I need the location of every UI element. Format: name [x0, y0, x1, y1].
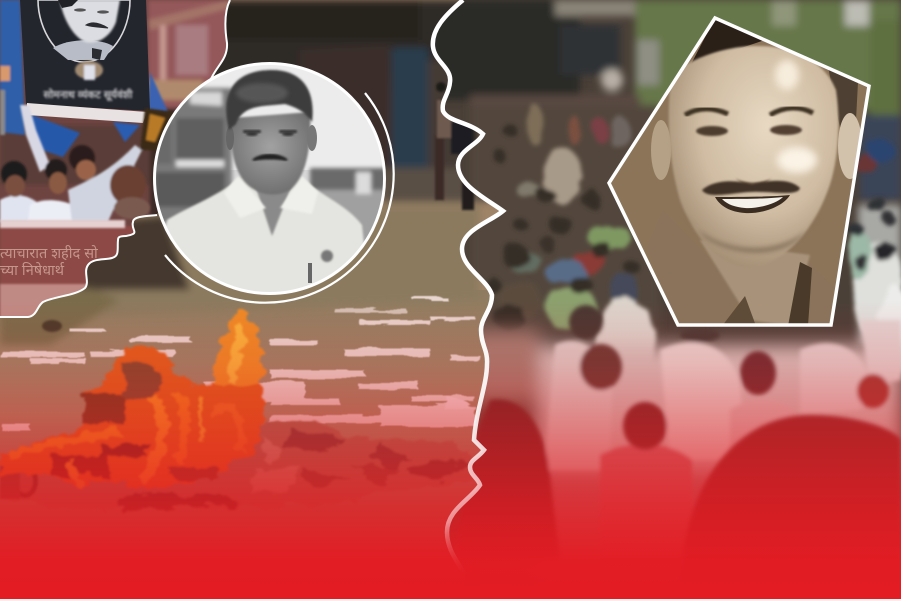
bottom edge: [0, 599, 901, 601]
smile: [715, 195, 790, 213]
sky: [201, 65, 382, 170]
poster text: सोमनाथ व्यंकट सूर्यवंशी: [42, 88, 134, 102]
banner slogan: त्याचारात शहीद सो: [0, 245, 98, 262]
face: [669, 46, 838, 268]
hair right: [828, 70, 858, 128]
building: [0, 0, 238, 228]
upper crowd: [486, 103, 901, 393]
moustache: [702, 181, 800, 195]
soil clump: [42, 320, 62, 332]
trees and buildings: [430, 0, 901, 345]
poster strip: [27, 103, 147, 123]
curve: right photo divider: [433, 0, 503, 575]
truck: [150, 88, 232, 223]
photo: protest with poster and banner: [0, 0, 240, 320]
poster: [20, 0, 150, 123]
neck: [255, 185, 292, 236]
protest banner: [0, 218, 134, 316]
ring arc: [165, 93, 394, 303]
collar: [224, 176, 318, 218]
scattered paper on road: [2, 297, 480, 431]
hair: [226, 70, 313, 130]
curve: left photo divider: [0, 0, 230, 317]
shirt: [166, 183, 365, 292]
chest: [700, 240, 810, 326]
fire flames: [0, 308, 264, 490]
ears: [651, 120, 671, 180]
eyes: [696, 126, 728, 136]
hair left: [692, 20, 762, 63]
large head in foreground: [690, 412, 901, 540]
nose shadow: [736, 178, 772, 185]
pocket pen and logo: [308, 263, 312, 283]
dark trees behind the road: [0, 0, 490, 345]
photo: seated crowd: [440, 0, 901, 542]
protest banner: च्या निषेधार्थ: [0, 262, 65, 279]
eyebrows: [685, 109, 728, 115]
debris mound: [0, 420, 472, 510]
shirt: [647, 210, 743, 326]
portrait: circle: [150, 60, 390, 300]
portrait: pentagon: [609, 18, 869, 326]
bystanders on road: [435, 82, 474, 210]
poster portrait: [38, 0, 130, 62]
protesters: [0, 105, 172, 222]
face: [231, 112, 310, 194]
highlight: [777, 147, 817, 173]
stubble: [701, 232, 804, 255]
icon: tyre in fire: [0, 464, 38, 499]
blue flags: [0, 0, 168, 157]
lower crowd in white shirts: [478, 318, 901, 544]
red gradient overlay: [0, 300, 901, 600]
poster emblem: [75, 61, 103, 80]
